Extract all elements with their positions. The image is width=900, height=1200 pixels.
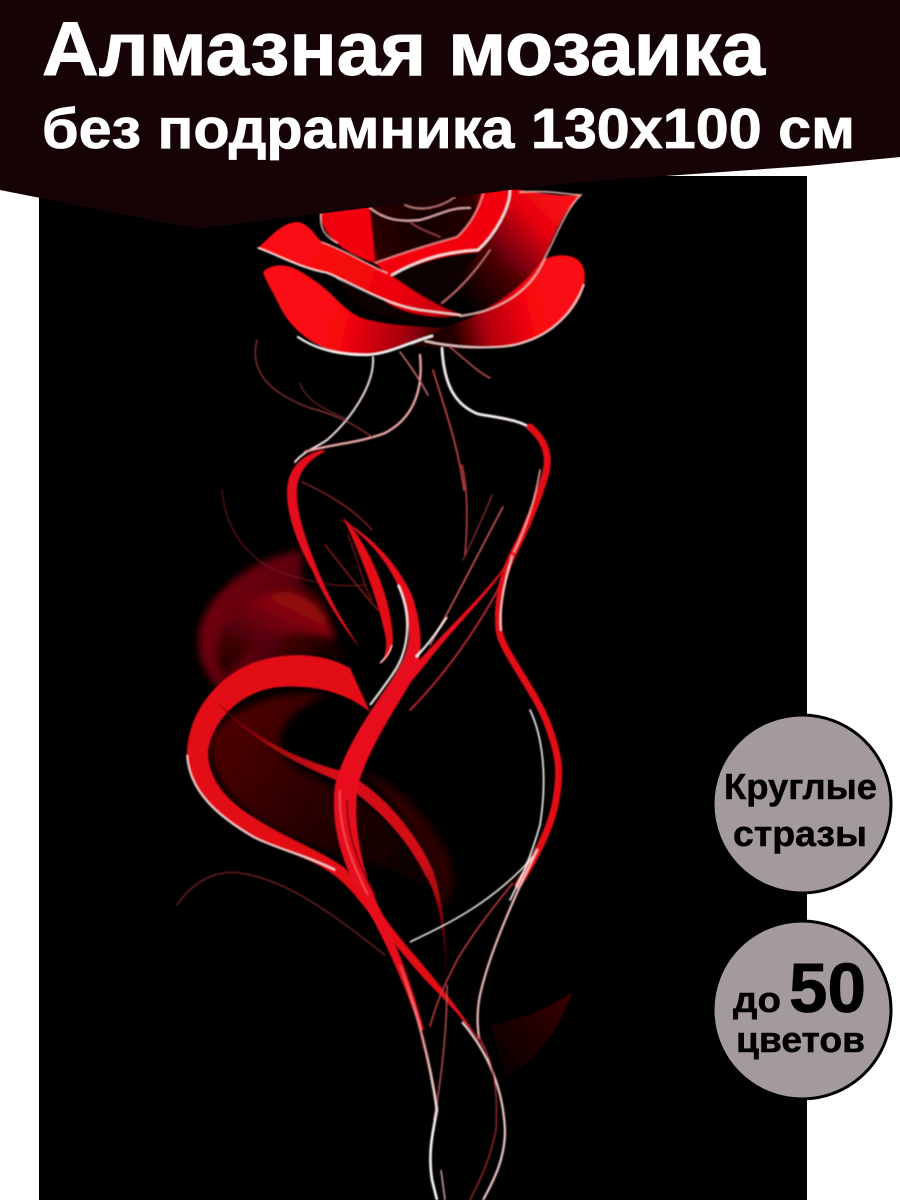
centre bud xyxy=(320,185,510,277)
second loop ribbon xyxy=(215,700,447,1120)
back right petal xyxy=(395,188,581,318)
lower left petal xyxy=(263,265,445,354)
dark gap xyxy=(335,277,450,322)
badge: up to 50 colours: 50 xyxy=(789,949,866,1027)
artwork panel: black canvas with rose figure xyxy=(39,176,807,1200)
neck, shoulders and thin wisps xyxy=(177,340,533,955)
badge: round rhinestones: Круглые xyxy=(724,766,877,807)
rose xyxy=(258,185,585,355)
main torso ribbon xyxy=(334,518,533,1200)
badge: round rhinestones: стразы xyxy=(733,813,867,854)
title line 1: Алмазная мозаика xyxy=(42,7,766,92)
right body ribbon xyxy=(478,427,559,1038)
smoke swirls behind figure xyxy=(198,550,572,1078)
big left loop ribbon xyxy=(187,655,505,1200)
left arm ribbon xyxy=(287,450,393,665)
left upper petal xyxy=(258,222,462,317)
dark throat xyxy=(390,252,480,305)
petal highlights xyxy=(258,190,584,355)
badge: up to 50 colours xyxy=(713,921,891,1099)
title banner xyxy=(0,0,900,229)
title line 2: без подрамника 130х100 см xyxy=(42,97,855,161)
badge: up to 50 colours: до xyxy=(733,979,781,1020)
badge: up to 50 colours: цветов xyxy=(736,1019,865,1060)
badge: round rhinestones xyxy=(713,715,891,893)
lower right petal xyxy=(410,255,585,349)
